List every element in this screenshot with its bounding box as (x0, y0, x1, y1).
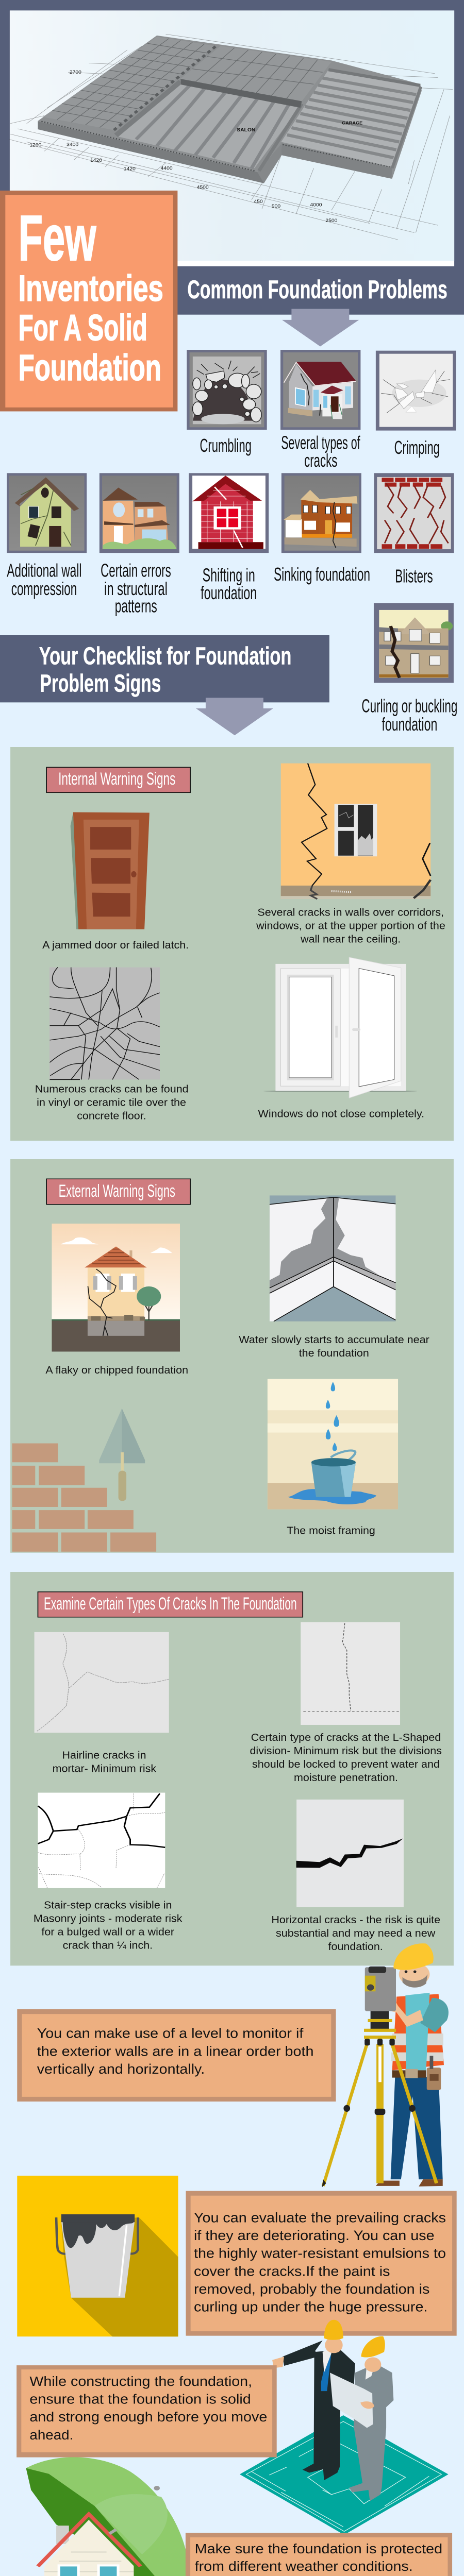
caption: in vinyl or ceramic tile over the (37, 1097, 186, 1108)
labels: row 2: patterns (115, 596, 157, 616)
caption (271, 1914, 440, 1953)
left tile panel (43, 37, 216, 130)
problem cards and labels (0, 432, 457, 735)
tip box: weather (186, 2533, 452, 2576)
heading (46, 1179, 190, 1205)
tip box: construction: While constructing the foundation, (29, 2374, 252, 2389)
title text (19, 202, 163, 388)
checklist heading band (0, 635, 329, 702)
card: crumbling (187, 350, 267, 430)
middle tile panel (180, 46, 332, 101)
caption (53, 1750, 156, 1774)
caption: should be locked to prevent water and (252, 1759, 440, 1770)
caption (35, 1083, 189, 1122)
card: blisters (374, 473, 454, 553)
title text: Inventories (19, 268, 163, 309)
card: sinking foundation (281, 473, 361, 553)
caption (239, 1334, 429, 1359)
hero image: foundation plan rendering: 1420 (124, 166, 136, 172)
illustration: open window (263, 957, 417, 1098)
illustration: horizontal crack (296, 1800, 404, 1907)
illustration: hairline crack (35, 1632, 169, 1733)
caption: The moist framing (287, 1526, 375, 1536)
caption: mortar- Minimum risk (53, 1763, 156, 1774)
caption: Hairline cracks in (62, 1750, 146, 1761)
caption: concrete floor. (77, 1111, 146, 1122)
labels: row 2 (7, 560, 457, 735)
caption: Certain type of cracks at the L-Shaped (251, 1732, 441, 1743)
tip box: evaluate cracks: removed, probably the foundation is (194, 2281, 429, 2297)
heading: External Warning Signs (59, 1181, 175, 1200)
right joists (281, 70, 421, 168)
card: additional wall compression (7, 473, 87, 553)
title text: For A Solid (19, 308, 147, 349)
arrow (282, 309, 359, 346)
checklist heading band: Problem Signs (40, 669, 161, 697)
caption: windows, or at the upper portion of the (256, 921, 445, 931)
heading (38, 1592, 303, 1617)
caption: A flaky or chipped foundation (45, 1365, 188, 1376)
illustration: house under umbrella (0, 2457, 189, 2576)
hero image: foundation plan rendering: 2700 (70, 70, 81, 75)
caption: foundation. (328, 1941, 383, 1953)
middle floor with beams: SALON (237, 128, 255, 133)
caption: for a bulged wall or a wider (41, 1927, 174, 1938)
caption (34, 1900, 183, 1951)
hero image: foundation plan rendering: 3400 (67, 142, 79, 147)
caption: crack than ¼ inch. (63, 1940, 153, 1951)
tip box: level (17, 2009, 336, 2102)
hero image: foundation plan rendering: 900 (272, 204, 281, 209)
hero image: foundation plan rendering: 2500 (325, 218, 338, 224)
caption: A jammed door or failed latch. (42, 940, 189, 951)
caption: Several cracks in walls over corridors, (257, 907, 444, 918)
labels: row 2: Additional wall (7, 560, 81, 581)
tip box: evaluate cracks: curling up under the huge pressure. (194, 2299, 427, 2314)
title box (0, 191, 177, 411)
card: curling or buckling foundation (374, 603, 454, 683)
labels: row 2: Shifting in (203, 565, 255, 585)
panel: types of cracks (10, 1572, 454, 1965)
tip box: evaluate cracks: the highly water-resistant emulsions to (194, 2245, 446, 2261)
hero image: foundation plan rendering: 1420 (90, 158, 103, 163)
tip box: construction: ensure that the foundation is solid (29, 2392, 251, 2407)
header band (0, 0, 464, 411)
illustration: paint bucket (17, 2176, 178, 2336)
labels: row 2: Certain errors (101, 560, 171, 581)
caption: substantial and may need a new (276, 1928, 436, 1939)
tip box: level: the exterior walls are in a linear order both (37, 2043, 313, 2059)
row 1 problem cards (187, 350, 456, 431)
tip box: evaluate cracks: if they are deteriorating. You can use (194, 2228, 435, 2243)
tips section lower (0, 2320, 452, 2576)
labels: row 2: in structural (104, 579, 168, 599)
card: shifting in foundation (189, 473, 269, 553)
heading (46, 767, 190, 792)
labels: row 2: foundation (201, 583, 257, 603)
labels: row 2: Sinking foundation (274, 564, 370, 585)
hero image: foundation plan rendering (9, 10, 454, 266)
tip box: evaluate cracks: You can evaluate the prevailing cracks (194, 2210, 446, 2225)
icon: door (71, 812, 150, 929)
tip box: level: vertically and horizontally. (37, 2061, 205, 2077)
illustration: leak and bucket (268, 1379, 398, 1510)
caption: Water slowly starts to accumulate near (239, 1334, 429, 1346)
hero image: foundation plan rendering: 450 (254, 199, 263, 205)
panel: internal warning signs (10, 747, 454, 1141)
tip box: weather: from different weather conditions. (195, 2560, 413, 2574)
tips section upper (17, 1943, 457, 2336)
hero image: foundation plan rendering: 1200 (29, 143, 42, 148)
labels: row 1: Crumbling (200, 435, 252, 456)
caption: division- Minimum risk but the divisions (250, 1745, 442, 1757)
card: several types of cracks (280, 350, 360, 430)
tip box: evaluate cracks: cover the cracks.If the paint is (194, 2263, 390, 2279)
caption: Horizontal cracks - the risk is quite (271, 1914, 440, 1926)
caption: Windows do not close completely. (258, 1108, 424, 1120)
hero image: foundation plan rendering: 4500 (197, 185, 209, 190)
caption: the foundation (299, 1348, 369, 1359)
caption (256, 907, 445, 945)
heading: Internal Warning Signs (58, 769, 175, 788)
labels: row 2: compression (11, 579, 77, 599)
illustration: L-shaped crack (301, 1622, 400, 1725)
tip box: construction: and strong enough before you move (29, 2410, 267, 2425)
arrow (196, 698, 273, 735)
card: certain errors (100, 473, 179, 553)
tip box: construction (16, 2365, 277, 2458)
labels: row 1: Several types of (281, 432, 360, 453)
panel: external warning signs (10, 1159, 454, 1553)
hero image: foundation plan rendering: 4000 (310, 202, 322, 208)
illustration: chipped foundation house (52, 1224, 180, 1351)
caption: moisture penetration. (294, 1772, 398, 1784)
caption: Numerous cracks can be found (35, 1083, 189, 1095)
illustration: cracked tile floor (49, 968, 160, 1079)
tip box: level: You can make use of a level to monitor if (37, 2025, 304, 2041)
icon: bricks and trowel (12, 1409, 156, 1552)
caption (250, 1732, 442, 1784)
illustration: water stain in wall corner (270, 1195, 395, 1321)
labels: row 1: cracks (304, 450, 337, 471)
illustration: surveyor with tripod (322, 1943, 449, 2187)
middle floor with beams (116, 79, 302, 171)
hero image: foundation plan rendering: 4400 (161, 166, 173, 171)
illustration: stair-step cracks (38, 1793, 165, 1888)
illustration: engineers on blueprint (240, 2320, 449, 2535)
illustration: cracked wall (281, 764, 430, 899)
card: crimping (376, 351, 456, 431)
title text: Few (19, 202, 96, 274)
labels: row 1 (200, 432, 440, 471)
caption: Stair-step cracks visible in (44, 1900, 172, 1911)
right joists: GARAGE (342, 121, 362, 125)
tip box: evaluate cracks (186, 2191, 457, 2336)
caption: Masonry joints - moderate risk (34, 1913, 183, 1924)
tip box: construction: ahead. (29, 2428, 73, 2443)
title text: Foundation (19, 347, 161, 388)
caption: wall near the ceiling. (300, 934, 401, 945)
